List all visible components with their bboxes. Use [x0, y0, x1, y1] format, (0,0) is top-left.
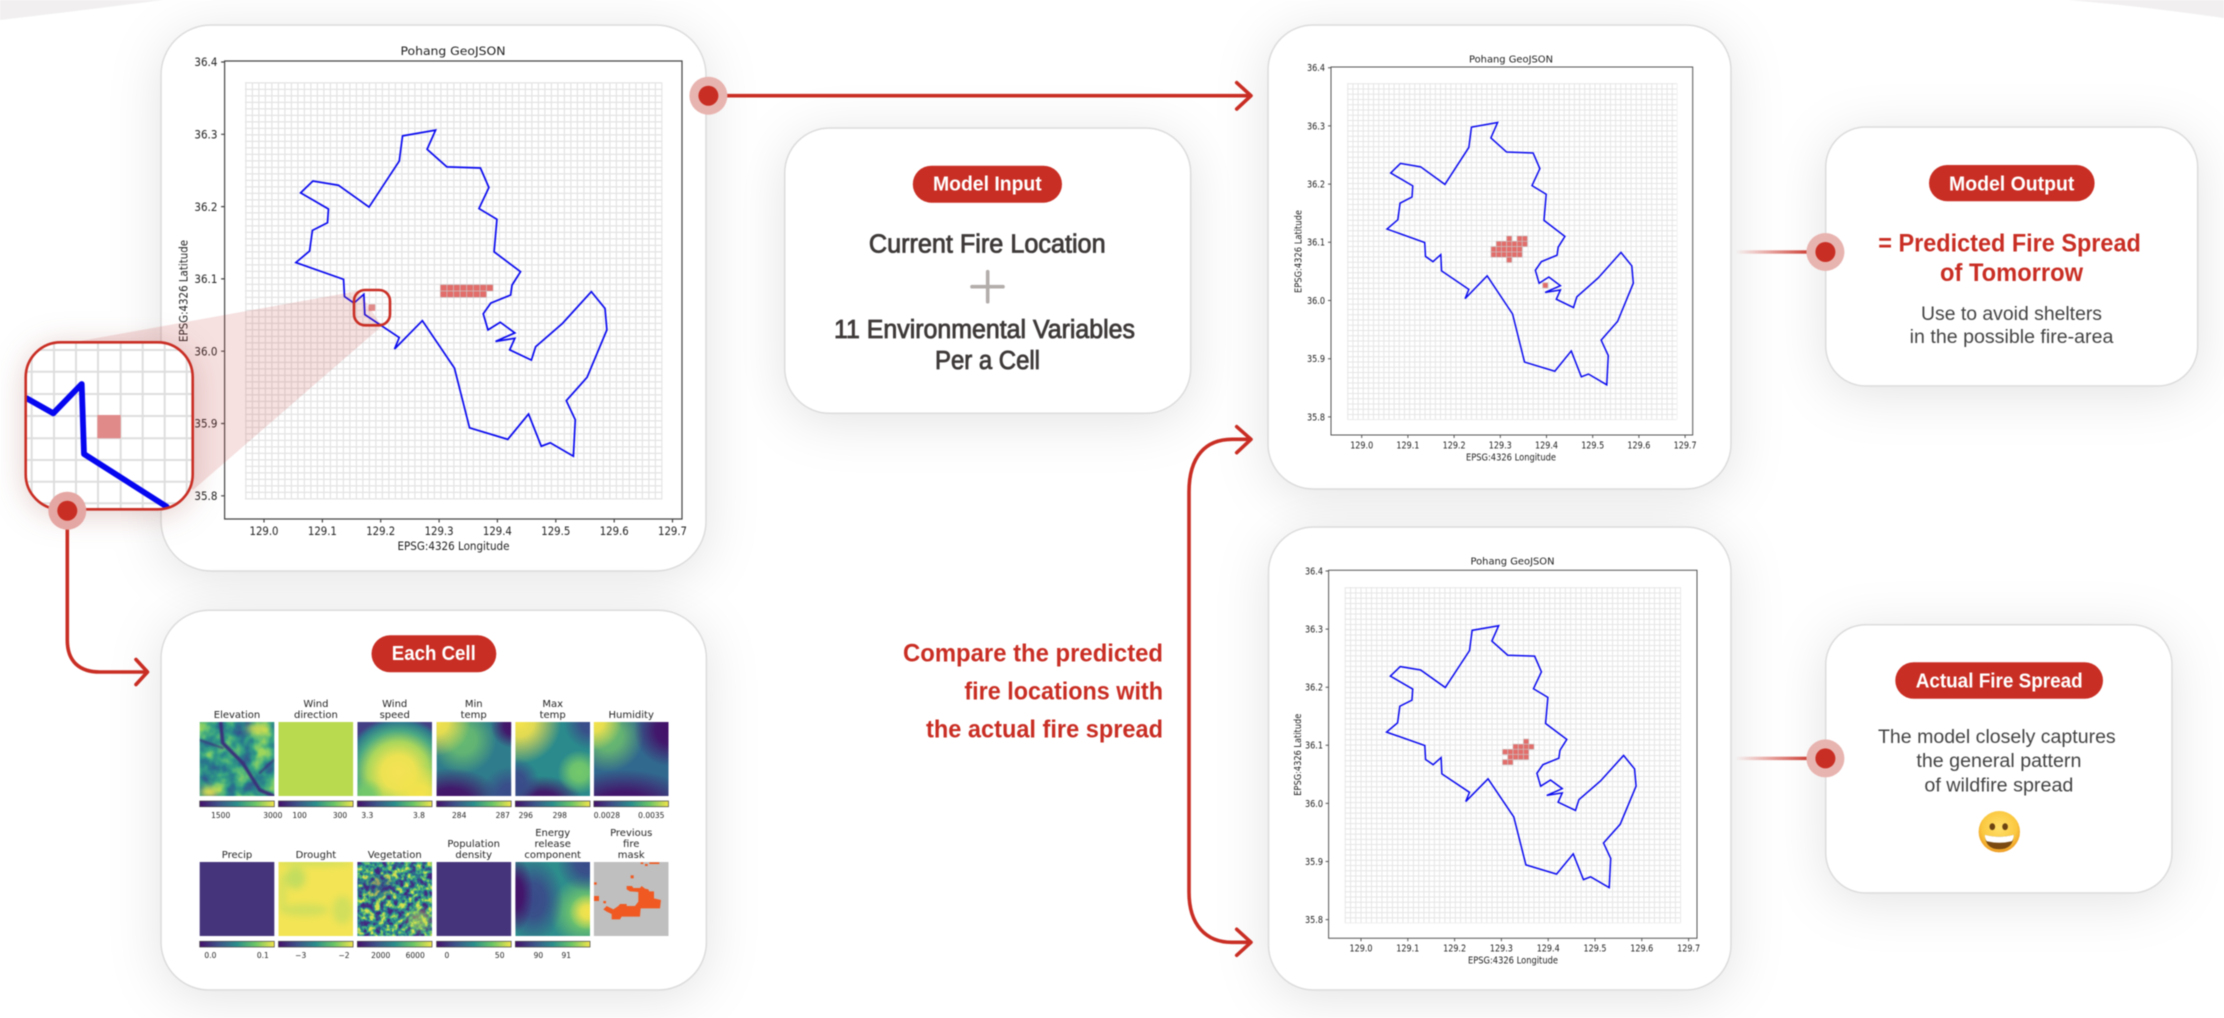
- colorbars: [200, 801, 668, 947]
- pill: Each Cell: Each Cell: [392, 642, 476, 665]
- colorbar labels: 100: [292, 811, 307, 820]
- y tick labels: 36.0: [1307, 296, 1325, 307]
- text: compare caption: Compare the predicted: [903, 640, 1163, 668]
- variable titles: [214, 699, 654, 861]
- y tick labels: 36.3: [194, 128, 217, 142]
- zoomed cell inset: [20, 340, 200, 512]
- connector: actual map to note: [1735, 739, 1844, 777]
- x tick labels: 129.0: [1350, 440, 1373, 451]
- heatmap: wind speed: [356, 721, 433, 797]
- x axis label: EPSG:4326 Longitude: [1468, 955, 1558, 966]
- variable titles: Population: [447, 839, 500, 850]
- variable titles: Energy: [535, 828, 570, 839]
- predicted fire cells: [1491, 236, 1548, 288]
- x tick labels: 129.2: [366, 524, 395, 538]
- y tick labels: 36.2: [194, 200, 217, 214]
- panel: actual fire spread note: [1826, 625, 2172, 893]
- y tick labels: 36.0: [194, 344, 217, 358]
- panel: predicted fire map: [1268, 25, 1731, 489]
- x tick labels: 129.7: [658, 524, 687, 538]
- arrow: inset to each cell panel: [67, 510, 148, 684]
- y tick labels: 36.1: [1305, 741, 1323, 752]
- colorbar labels: 0.0: [204, 951, 217, 960]
- variable titles: fire: [623, 839, 639, 850]
- x tick labels: 129.5: [1584, 943, 1607, 954]
- heatmap: population density: [437, 862, 511, 936]
- colorbar labels: 3.3: [361, 811, 373, 820]
- heatmap: energy release component: [514, 861, 591, 937]
- heatmap: min temp: [436, 721, 512, 797]
- fire mask: [594, 862, 668, 936]
- variable titles: temp: [540, 710, 566, 721]
- y tick labels: 35.9: [194, 417, 217, 431]
- text: predicted fire spread: of Tomorrow: [1940, 259, 2084, 287]
- y tick labels: 36.2: [1307, 180, 1325, 190]
- heatmap: precip: [200, 862, 274, 936]
- inset boundary: [27, 384, 167, 507]
- x tick labels: [1350, 943, 1700, 954]
- variable titles: temp: [461, 710, 487, 721]
- plot axes: [1328, 67, 1693, 438]
- text: environmental variables: [834, 316, 1135, 375]
- variable titles: Min: [465, 699, 483, 710]
- variable titles: Humidity: [609, 710, 654, 721]
- y tick labels: 35.8: [1305, 915, 1323, 926]
- text: usage note: in the possible fire-area: [1910, 327, 2114, 348]
- x tick labels: [1350, 440, 1697, 451]
- text: compare caption: [903, 640, 1163, 743]
- colorbar labels: 50: [495, 951, 505, 960]
- x tick labels: 129.1: [308, 524, 337, 538]
- colorbar labels: 91: [562, 951, 571, 960]
- map grid: [1345, 587, 1681, 923]
- heatmap: humidity: [593, 721, 670, 797]
- background corner shape: top right: [2068, 0, 2224, 18]
- inset fire cell: [97, 415, 121, 438]
- colorbar labels: 6000: [406, 951, 425, 960]
- map title: Pohang GeoJSON: [1469, 54, 1553, 66]
- x tick labels: 129.1: [1396, 440, 1419, 451]
- x axis label: EPSG:4326 Longitude: [1466, 452, 1556, 463]
- colorbar labels: 1500: [211, 811, 230, 820]
- y axis label: EPSG:4326 Latitude: [1293, 210, 1304, 293]
- x tick labels: [250, 524, 687, 538]
- heatmap: drought: [276, 858, 353, 936]
- colorbar labels: 3.8: [413, 811, 425, 820]
- x tick labels: 129.5: [1581, 440, 1604, 451]
- x tick labels: 129.3: [425, 524, 454, 538]
- y tick labels: 35.9: [1305, 857, 1323, 868]
- text: predicted fire spread: = Predicted Fire Spread: [1878, 230, 2141, 258]
- x tick labels: 129.6: [1630, 943, 1653, 954]
- pill: Each Cell: [372, 635, 496, 672]
- small selection box: [354, 290, 390, 325]
- plot axes: [1326, 570, 1697, 941]
- variable titles: component: [524, 850, 581, 861]
- pill: Actual Fire Spread: Actual Fire Spread: [1916, 669, 2083, 692]
- text: compare caption: fire locations with: [964, 677, 1163, 705]
- pill: Actual Fire Spread: [1895, 662, 2103, 699]
- colorbar labels: 300: [333, 811, 347, 820]
- y tick labels: [1307, 63, 1325, 423]
- x tick labels: 129.3: [1489, 440, 1512, 451]
- zoom funnel: [75, 291, 382, 490]
- connector: prediction map to output: [1735, 233, 1844, 271]
- variable titles: release: [534, 839, 571, 850]
- y axis label: EPSG:4326 Latitude: [176, 240, 190, 342]
- pill: Model Output: [1929, 165, 2095, 201]
- heatmap: elevation: [200, 722, 274, 797]
- pill: Model Input: [913, 166, 1062, 203]
- x tick labels: 129.2: [1443, 943, 1466, 954]
- variable titles: Wind: [382, 699, 407, 710]
- x tick labels: 129.3: [1490, 943, 1513, 954]
- variable titles: Elevation: [214, 710, 260, 721]
- heatmap: max temp: [514, 721, 591, 797]
- text: model result: of wildfire spread: [1924, 776, 2073, 796]
- y tick labels: 36.4: [194, 55, 217, 69]
- map grid: [245, 82, 662, 500]
- variable titles: speed: [380, 710, 410, 721]
- colorbar labels: 298: [553, 811, 567, 820]
- inset grid: [26, 343, 192, 508]
- colorbar labels: 2000: [371, 951, 390, 960]
- Pohang boundary: [1387, 122, 1633, 385]
- x tick labels: 129.6: [1627, 440, 1650, 451]
- panel: current fire map: [161, 25, 706, 571]
- x tick labels: 129.4: [483, 524, 512, 538]
- variable titles: Precip: [222, 850, 252, 861]
- text: environmental variables: 11 Environmental Variables: [834, 316, 1135, 344]
- y axis label: EPSG:4326 Latitude: [1293, 713, 1304, 796]
- colorbar labels: 296: [519, 811, 533, 820]
- y tick labels: [1305, 566, 1323, 926]
- variable titles: Max: [542, 699, 563, 710]
- map grid: [1347, 83, 1677, 420]
- variable titles: density: [455, 850, 492, 861]
- x tick labels: 129.7: [1674, 440, 1697, 451]
- text: environmental variables: Per a Cell: [935, 347, 1040, 375]
- colorbar labels: −2: [338, 951, 350, 960]
- y tick labels: 36.4: [1307, 63, 1325, 74]
- text: model result: The model closely captures: [1878, 727, 2116, 748]
- variable titles: mask: [618, 850, 645, 861]
- variable titles: direction: [294, 710, 338, 721]
- y tick labels: 36.3: [1307, 121, 1325, 132]
- icon: plus: [972, 272, 1003, 302]
- text: usage note: Use to avoid shelters: [1921, 304, 2102, 325]
- x tick labels: 129.2: [1443, 440, 1466, 451]
- colorbar labels: −3: [295, 951, 306, 960]
- colorbar labels: 287: [496, 811, 510, 820]
- heatmap: vegetation: [357, 862, 432, 936]
- text: compare caption: the actual fire spread: [926, 715, 1163, 743]
- x tick labels: 129.5: [541, 524, 570, 538]
- panel: model input: [785, 128, 1191, 413]
- y tick labels: 36.1: [194, 272, 217, 286]
- variable titles: Vegetation: [368, 850, 422, 861]
- Pohang boundary: [1387, 626, 1636, 888]
- x tick labels: 129.4: [1535, 440, 1558, 451]
- y tick labels: [194, 55, 217, 503]
- x tick labels: 129.4: [1537, 943, 1560, 954]
- connector dot: map: [689, 77, 727, 115]
- y tick labels: 35.8: [194, 489, 217, 503]
- panel: actual fire map: [1268, 527, 1731, 990]
- x axis label: EPSG:4326 Longitude: [398, 539, 510, 553]
- text: model result: the general pattern: [1916, 751, 2081, 772]
- arrow: map to prediction map: [708, 83, 1251, 109]
- colorbar labels: 0.1: [257, 951, 269, 960]
- y tick labels: 36.3: [1305, 624, 1323, 636]
- panel: each cell variables: [161, 610, 706, 990]
- arrow: compare bracket: [1189, 427, 1251, 955]
- colorbar labels: 0: [445, 951, 450, 960]
- panel: model output: [1826, 127, 2198, 386]
- pill: Model Output: Model Output: [1949, 173, 2075, 196]
- icon: grinning emoji: [1979, 811, 2020, 852]
- text: model result: [1878, 727, 2116, 796]
- actual fire cells: [1502, 739, 1534, 765]
- Pohang boundary: [296, 130, 607, 456]
- text: current fire location: Current Fire Location: [869, 230, 1106, 258]
- y tick labels: 36.1: [1307, 238, 1325, 249]
- x tick labels: 129.0: [250, 524, 278, 538]
- colorbar labels: 284: [452, 811, 467, 820]
- y tick labels: 36.4: [1305, 566, 1323, 577]
- text: predicted fire spread: [1878, 230, 2141, 287]
- colorbar labels: 0.0028: [594, 811, 620, 820]
- colorbar labels: 3000: [263, 811, 283, 820]
- heatmap: wind direction: [278, 722, 353, 796]
- variable titles: Wind: [303, 699, 328, 710]
- colorbar labels: 90: [534, 951, 543, 960]
- plot axes: [221, 61, 682, 522]
- x tick labels: 129.7: [1677, 943, 1700, 954]
- pill: Model Input: Model Input: [933, 173, 1042, 196]
- variable titles: Drought: [296, 850, 336, 861]
- variable titles: Previous: [610, 828, 652, 839]
- x tick labels: 129.6: [600, 524, 629, 538]
- x tick labels: 129.1: [1396, 943, 1419, 954]
- colorbar labels: [204, 811, 665, 960]
- background corner shape: top left: [0, 0, 163, 20]
- map title: Pohang GeoJSON: [400, 44, 506, 58]
- y tick labels: 35.9: [1307, 354, 1325, 365]
- text: usage note: [1910, 304, 2114, 348]
- x tick labels: 129.0: [1350, 943, 1373, 954]
- current fire cells: [369, 285, 493, 311]
- map title: Pohang GeoJSON: [1470, 556, 1555, 568]
- connector dot: inset: [48, 492, 86, 530]
- y tick labels: 36.2: [1305, 683, 1323, 694]
- y tick labels: 36.0: [1305, 799, 1323, 810]
- colorbar labels: 0.0035: [638, 811, 665, 820]
- y tick labels: 35.8: [1307, 412, 1325, 423]
